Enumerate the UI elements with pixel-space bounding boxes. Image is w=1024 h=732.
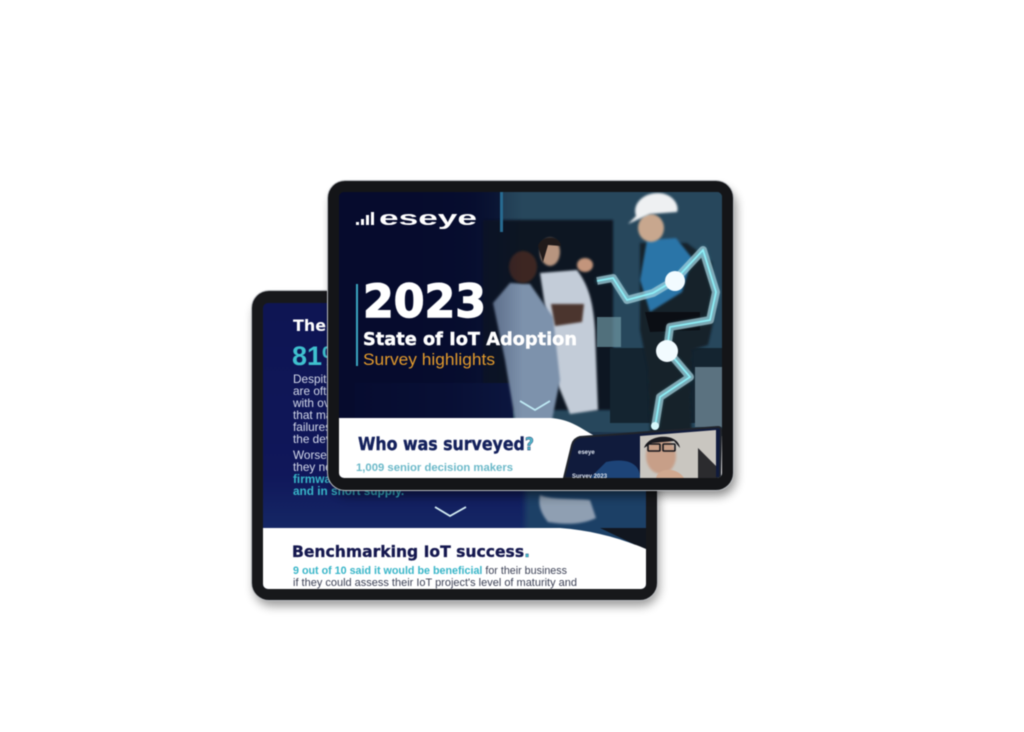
body copy: the devi: [293, 432, 334, 446]
arrow: down chevron: [435, 507, 466, 516]
heading: The: The: [293, 316, 326, 335]
photo: lab background: [463, 192, 722, 432]
mini logo: eseye: [578, 450, 595, 456]
photo: exoskeleton engineer: [577, 193, 716, 432]
photo: man in lab coat: [493, 251, 584, 420]
body copy: that may: [293, 408, 338, 422]
body copy: firmware: [293, 472, 343, 486]
arrow: down chevron: [520, 401, 550, 410]
white panel: benchmarking: [263, 528, 646, 589]
text: 1,009 senior decision makers: 1,009 senior decision makers: [356, 462, 513, 474]
hard hat: [628, 193, 678, 224]
white panel: who was surveyed: [339, 418, 722, 478]
mini title: Survey 2023: [572, 474, 608, 480]
text: benchmarking copy: 9 out of 10 said it would be beneficial for their business: [293, 565, 567, 577]
exoskeleton frame: [597, 250, 716, 427]
body copy: they need: [293, 460, 345, 474]
heading: benchmarking: Benchmarking IoT success.: [292, 542, 530, 561]
subtitle: survey highlights: Survey highlights: [363, 351, 495, 369]
body copy: are often: [293, 384, 340, 398]
logo: eseye: eseye: [379, 208, 477, 230]
heading: who was surveyed: Who was surveyed?: [358, 435, 534, 455]
back screen: [263, 303, 650, 589]
front screen: [339, 192, 722, 480]
title: 2023: 2023: [363, 275, 486, 328]
dark overlay: [355, 192, 516, 418]
mini tablet preview: [564, 427, 721, 480]
title: State of IoT Adoption: State of IoT Adoption: [363, 329, 577, 350]
tablet: front: [327, 180, 736, 496]
logo: eseye: [355, 211, 476, 230]
white panel: benchmarking: if they could assess their IoT project's level of maturity and: [293, 577, 577, 589]
body copy: Despite: [293, 372, 333, 386]
rule: title accent: [356, 284, 358, 366]
photo: woman in lab coat: [538, 238, 598, 414]
body copy: with over: [292, 396, 340, 410]
tablet: back: [251, 290, 659, 606]
stat: 81%: 81%: [292, 341, 346, 371]
hand: [577, 258, 593, 272]
body copy: Worse: [293, 448, 327, 462]
body copy: failures: [293, 420, 331, 434]
body copy: and in short supply.: [293, 484, 404, 498]
body copy: [292, 372, 404, 498]
photo: worker at lower right: [523, 491, 646, 550]
